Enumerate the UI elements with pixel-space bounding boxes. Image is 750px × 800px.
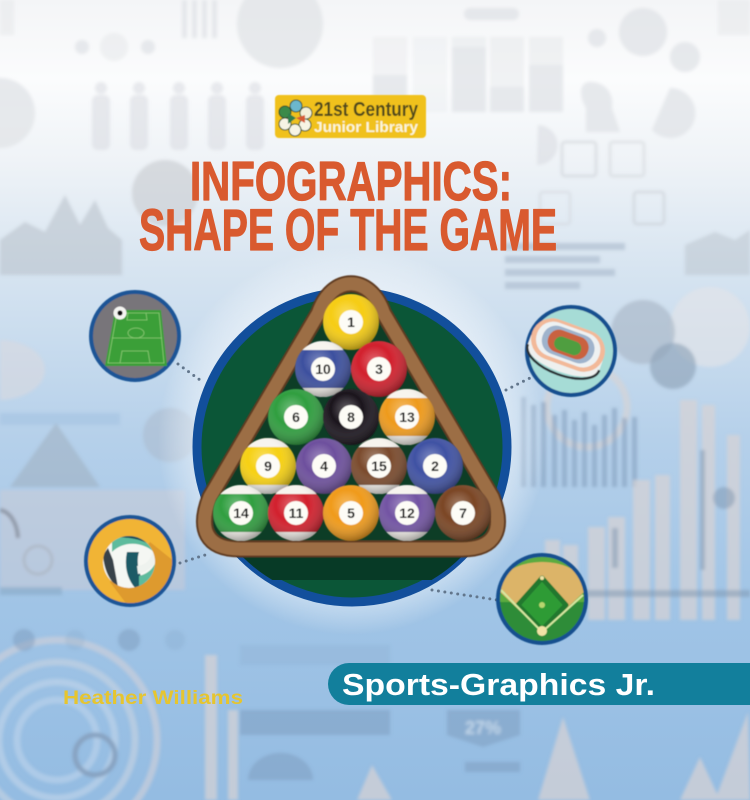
ball 11: 11 [289, 505, 304, 521]
ball 1 [323, 294, 379, 350]
dotted connector lines [178, 364, 530, 600]
main circle: billiard table [190, 292, 520, 602]
title [139, 150, 557, 263]
billiard balls [213, 294, 491, 541]
logo text: Junior Library [314, 119, 419, 136]
logo text: 21st Century [314, 99, 419, 121]
soccer ball [114, 306, 126, 320]
right middle shapes [547, 287, 750, 447]
baseball field [496, 552, 588, 636]
ball 14: 14 [233, 505, 249, 521]
icon: soccer field circle [91, 292, 179, 380]
ball 4 [296, 438, 352, 494]
ball 2: 2 [431, 458, 439, 474]
ball 8: 8 [347, 409, 355, 425]
ball 5 [323, 485, 379, 541]
ball 6 [268, 389, 324, 445]
logo text [314, 99, 419, 136]
ball 7 [435, 485, 491, 541]
ball 1: 1 [347, 314, 355, 330]
left middle shapes [0, 340, 197, 595]
ball 6: 6 [292, 409, 300, 425]
background: faint data-graphic pattern: 27% [465, 718, 501, 738]
series banner: Sports-Graphics Jr. [342, 667, 655, 702]
ball 9 [240, 438, 296, 494]
icon: flower logo [279, 100, 312, 136]
ball 9: 9 [264, 458, 272, 474]
soccer pitch [105, 310, 167, 366]
stadium [522, 312, 611, 387]
concentric rings [0, 640, 157, 800]
title: INFOGRAPHICS: [190, 150, 512, 212]
ball 7: 7 [459, 505, 467, 521]
ball 10 [295, 341, 351, 397]
series banner [328, 663, 750, 705]
volleyball [103, 535, 158, 590]
ball 3: 3 [375, 361, 383, 377]
publisher logo: 21st Century Junior Library [275, 95, 426, 138]
author name: Heather Williams [63, 688, 243, 709]
ball 14 [213, 485, 269, 541]
ball 5: 5 [347, 505, 355, 521]
ball 15 [351, 438, 407, 494]
ball 15: 15 [371, 458, 387, 474]
soft glow behind billiard rack [157, 245, 547, 635]
ball 13 [379, 389, 435, 445]
ball 11 [268, 485, 324, 541]
ball 12: 12 [399, 505, 415, 521]
icon: volleyball circle [86, 517, 185, 612]
billiard rack [204, 284, 498, 549]
ball 2 [407, 438, 463, 494]
title: SHAPE OF THE GAME [139, 198, 557, 263]
ball 3 [351, 341, 407, 397]
ball 10: 10 [315, 361, 331, 377]
ball 4: 4 [320, 458, 328, 474]
ball 8 [323, 389, 379, 445]
ball 12 [379, 485, 435, 541]
icon: stadium circle [522, 307, 615, 395]
ball 13: 13 [399, 409, 415, 425]
icon: baseball diamond circle [496, 552, 588, 643]
